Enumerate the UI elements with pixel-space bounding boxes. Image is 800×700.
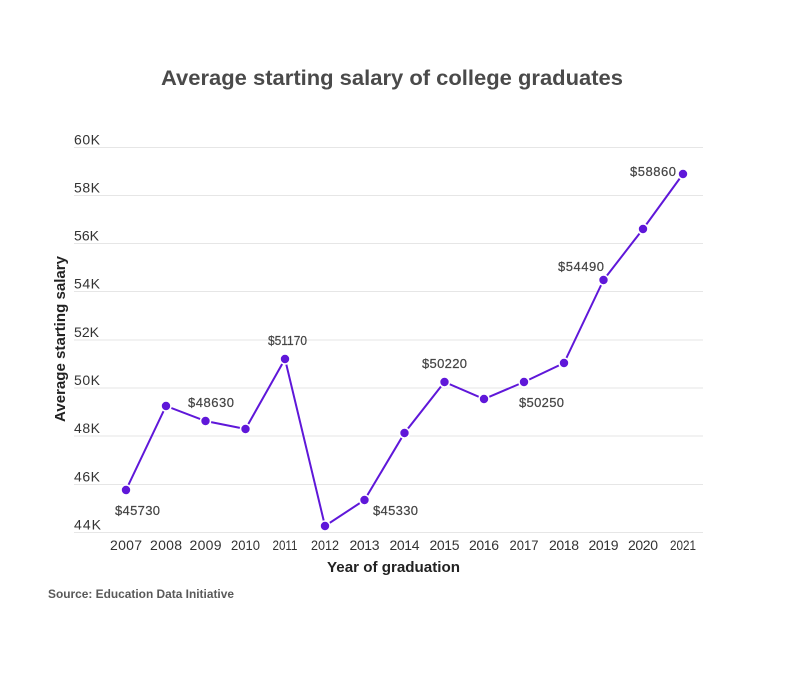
y axis tick labels bbox=[74, 132, 102, 532]
y axis tick labels: 50K bbox=[74, 372, 101, 388]
y axis tick labels: 56K bbox=[74, 228, 100, 244]
y axis tick labels: 46K bbox=[74, 468, 101, 484]
data labels bbox=[115, 164, 676, 518]
y axis tick labels: 54K bbox=[74, 276, 101, 292]
x axis tick labels: 2014 bbox=[390, 537, 420, 553]
y axis tick labels: 44K bbox=[74, 516, 102, 532]
x axis tick labels: 2013 bbox=[350, 537, 380, 553]
data labels: $51170 bbox=[268, 333, 307, 348]
data line bbox=[126, 174, 683, 526]
data labels: $50250 bbox=[519, 395, 564, 410]
x axis tick labels: 2021 bbox=[670, 537, 696, 553]
data labels: $54490 bbox=[558, 259, 604, 274]
data labels: $50220 bbox=[422, 356, 467, 371]
source note: Source: Education Data Initiative bbox=[48, 589, 234, 601]
x axis tick labels: 2015 bbox=[430, 537, 460, 553]
data labels: $48630 bbox=[188, 395, 234, 410]
x axis title: Year of graduation bbox=[327, 559, 460, 576]
data labels: $45330 bbox=[373, 503, 418, 518]
data labels: $58860 bbox=[630, 164, 676, 179]
y axis tick labels: 60K bbox=[74, 132, 101, 148]
x axis tick labels: 2009 bbox=[190, 537, 222, 553]
y axis tick labels: 48K bbox=[74, 420, 101, 436]
x axis tick labels: 2012 bbox=[311, 537, 339, 553]
x axis tick labels: 2020 bbox=[628, 537, 658, 553]
data points bbox=[121, 169, 688, 531]
x axis tick labels: 2017 bbox=[510, 537, 539, 553]
x axis tick labels: 2016 bbox=[469, 537, 499, 553]
x axis tick labels: 2008 bbox=[150, 537, 182, 553]
x axis tick labels: 2010 bbox=[231, 537, 260, 553]
x axis tick labels bbox=[110, 537, 696, 553]
line chart bbox=[74, 132, 703, 553]
x axis tick labels: 2018 bbox=[549, 537, 579, 553]
x axis tick labels: 2011 bbox=[272, 537, 298, 553]
y axis title: Average starting salary bbox=[53, 256, 69, 422]
x axis tick labels: 2007 bbox=[110, 537, 142, 553]
x axis tick labels: 2019 bbox=[588, 537, 619, 553]
y axis tick labels: 52K bbox=[74, 324, 100, 340]
data labels: $45730 bbox=[115, 503, 160, 518]
y axis tick labels: 58K bbox=[74, 180, 101, 196]
title: Average starting salary of college graduates bbox=[161, 66, 623, 90]
